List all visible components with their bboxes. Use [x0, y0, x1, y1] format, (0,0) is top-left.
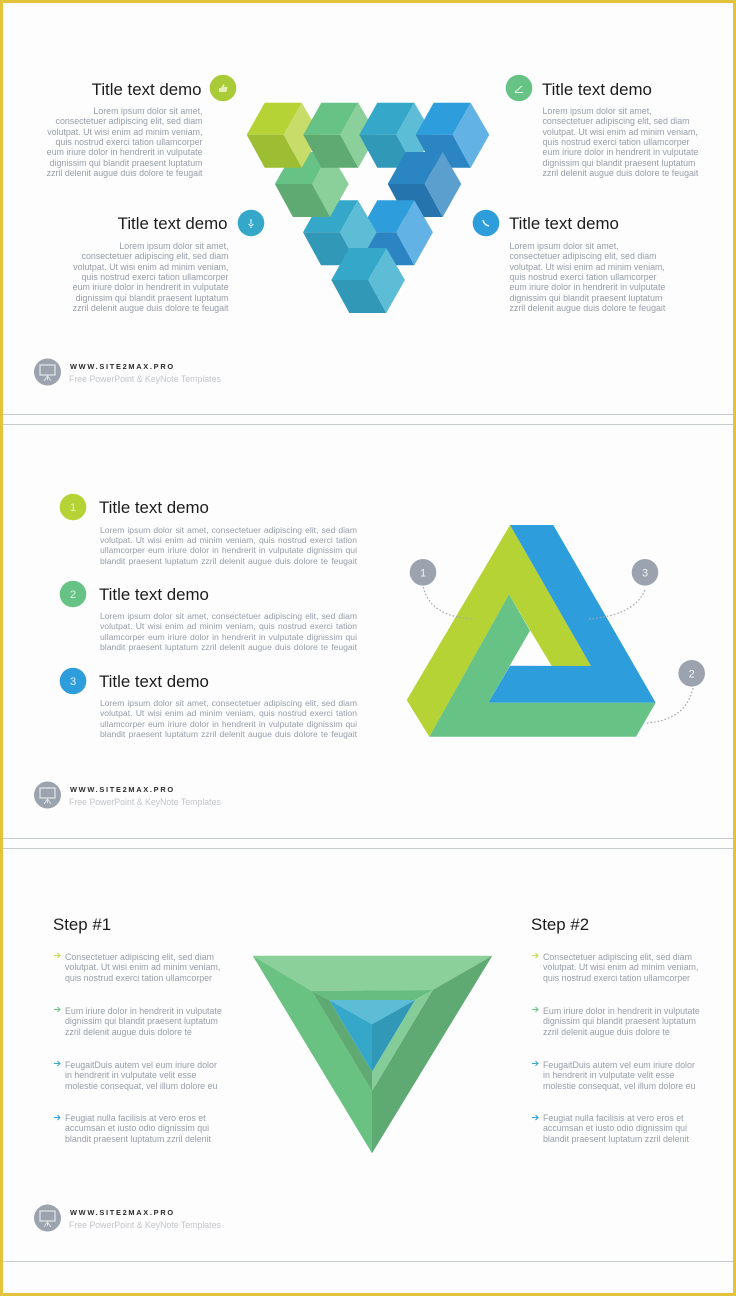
text: step 2 bullets — [543, 952, 700, 1144]
text: top right: Lorem ipsum dolor sit amet, — [542, 106, 652, 116]
text: top left: consectetuer adipiscing elit, sed diam — [56, 116, 202, 126]
text: mid right: dignissim qui blandit praesent luptatum — [510, 293, 662, 303]
text: mid right: Lorem ipsum dolor sit amet, — [510, 241, 619, 251]
text: step 1 bullets: volutpat. Ut wisi enim ad minim veniam, — [65, 962, 220, 972]
text: step 2 bullets: dignissim qui blandit praesent luptatum — [543, 1016, 696, 1026]
text: step 2 bullets: accumsan et iusto odio dignissim qui — [543, 1123, 687, 1133]
text: item 2: volutpat. Ut wisi enim ad minim veniam, quis nostrud exerci tation — [100, 621, 357, 631]
text: step 1 bullets: FeugaitDuis autem vel eum iriure dolor — [65, 1060, 217, 1070]
bullet arrows — [54, 953, 538, 1120]
text: top right: consectetuer adipiscing elit, sed diam — [542, 116, 689, 126]
text: mid right: quis nostrud exerci tation ullamcorper — [510, 272, 656, 282]
footer: slide 3 — [69, 1208, 221, 1230]
text: mid right: consectetuer adipiscing elit, sed diam — [510, 251, 656, 261]
text: item 1: Lorem ipsum dolor sit amet, consectetuer adipiscing elit, sed diam — [100, 524, 357, 534]
icon circles top — [210, 75, 532, 236]
text: step 2 bullets: volutpat. Ut wisi enim ad minim veniam, — [543, 962, 698, 972]
text: item 3 — [100, 698, 357, 739]
text: step 1 bullets: quis nostrud exerci tation ullamcorper — [65, 973, 212, 983]
text: top left: Lorem ipsum dolor sit amet, — [93, 106, 202, 116]
text: step 1 bullets: accumsan et iusto odio dignissim qui — [65, 1123, 209, 1133]
text: mid left: zzril delenit augue duis dolore te feugait — [73, 303, 228, 313]
text: item 3: volutpat. Ut wisi enim ad minim veniam, quis nostrud exerci tation — [100, 708, 357, 718]
callout circles — [410, 559, 705, 687]
heading: mid right: Title text demo — [509, 214, 619, 233]
cube triangle diagram — [247, 103, 489, 313]
text: step 1 bullets: in hendrerit in vulputate velit esse — [65, 1070, 196, 1080]
text: top left: dignissim qui blandit praesent luptatum — [50, 158, 202, 168]
text: top right: zzril delenit augue duis dolore te feugait — [542, 168, 698, 178]
footer: slide 2: WWW.SITE2MAX.PRO — [70, 785, 175, 794]
text: mid left: consectetuer adipiscing elit, sed diam — [82, 251, 228, 261]
footer icons — [34, 358, 61, 1232]
text: top left: quis nostrud exerci tation ullamcorper — [56, 137, 202, 147]
text: top right: eum iriure dolor in hendrerit in vulputate — [542, 147, 698, 157]
text: mid left — [73, 241, 228, 313]
text: item 2: blandit praesent luptatum zzril delenit augue duis dolore te feugait — [100, 642, 357, 652]
text: step 2 bullets: blandit praesent luptatum zzril delenit — [543, 1134, 689, 1144]
text: top right — [542, 106, 698, 178]
text: step 1 bullets: molestie consequat, vel illum dolore eu — [65, 1081, 217, 1091]
footer: slide 1: Free PowerPoint & KeyNote Templates — [69, 374, 221, 384]
footer: slide 1 — [69, 362, 221, 384]
text: item 1 — [100, 524, 357, 566]
number circles — [60, 494, 86, 694]
text: mid left: eum iriure dolor in hendrerit in vulputate — [73, 282, 228, 292]
text: item 1: blandit praesent luptatum zzril delenit augue duis dolore te feugait — [100, 556, 357, 566]
heading: top left: Title text demo — [92, 80, 202, 99]
number circles: 3 — [70, 676, 76, 688]
number circles: 2 — [70, 589, 76, 601]
text: mid left: Lorem ipsum dolor sit amet, — [119, 241, 228, 251]
heading: step 2: Step #2 — [531, 915, 589, 934]
number circles: 1 — [70, 502, 76, 514]
heading: item 2: Title text demo — [99, 585, 209, 604]
text: mid left: dignissim qui blandit praesent luptatum — [76, 293, 228, 303]
text: mid right: eum iriure dolor in hendrerit in vulputate — [510, 282, 665, 292]
footer: slide 2: Free PowerPoint & KeyNote Templates — [69, 796, 221, 806]
callout circles: 2 — [689, 668, 695, 680]
text: mid left: quis nostrud exerci tation ullamcorper — [82, 272, 228, 282]
text: top right: volutpat. Ut wisi enim ad minim veniam, — [542, 127, 698, 137]
text: step 2 bullets: zzril delenit augue duis dolore te — [543, 1027, 670, 1037]
callout circles: 3 — [642, 568, 648, 580]
heading: top right: Title text demo — [542, 80, 652, 99]
text: top left: volutpat. Ut wisi enim ad minim veniam, — [47, 127, 202, 137]
text: step 2 bullets: quis nostrud exerci tation ullamcorper — [543, 973, 690, 983]
text: mid left: volutpat. Ut wisi enim ad minim veniam, — [73, 262, 228, 272]
text: step 1 bullets — [65, 952, 222, 1144]
callout lines — [423, 587, 693, 723]
text: step 1 bullets: Feugiat nulla facilisis at vero eros et — [65, 1113, 206, 1123]
text: step 2 bullets: Eum iriure dolor in hendrerit in vulputate — [543, 1006, 700, 1016]
text: step 1 bullets: blandit praesent luptatum zzril delenit — [65, 1134, 211, 1144]
text: item 2: Lorem ipsum dolor sit amet, consectetuer adipiscing elit, sed diam — [100, 611, 357, 621]
text: item 3: ullamcorper eum iriure dolor in hendrerit in vulputate dignissim qui — [100, 719, 357, 729]
callout circles: 1 — [420, 568, 426, 580]
text: step 2 bullets: FeugaitDuis autem vel eum iriure dolor — [543, 1060, 695, 1070]
text: mid right: zzril delenit augue duis dolore te feugait — [510, 303, 665, 313]
text: step 1 bullets: Eum iriure dolor in hendrerit in vulputate — [65, 1006, 222, 1016]
text: item 1: ullamcorper eum iriure dolor in hendrerit in vulputate dignissim qui — [100, 545, 357, 555]
text: mid right: volutpat. Ut wisi enim ad minim veniam, — [510, 262, 665, 272]
text: top left: zzril delenit augue duis dolore te feugait — [47, 168, 202, 178]
text: item 2 — [100, 611, 357, 652]
nested pyramid diagram — [253, 956, 492, 1153]
footer: slide 3: WWW.SITE2MAX.PRO — [70, 1208, 175, 1217]
heading: item 3: Title text demo — [99, 672, 209, 691]
text: step 2 bullets: Feugiat nulla facilisis at vero eros et — [543, 1113, 684, 1123]
text: step 2 bullets: in hendrerit in vulputate velit esse — [543, 1070, 674, 1080]
heading: step 1: Step #1 — [53, 915, 111, 934]
footer: slide 1: WWW.SITE2MAX.PRO — [70, 362, 175, 371]
text: top left: eum iriure dolor in hendrerit in vulputate — [47, 147, 202, 157]
heading: item 1: Title text demo — [99, 498, 209, 517]
text: step 1 bullets: Consectetuer adipiscing elit, sed diam — [65, 952, 214, 962]
text: item 3: Lorem ipsum dolor sit amet, consectetuer adipiscing elit, sed diam — [100, 698, 357, 708]
text: top right: quis nostrud exerci tation ullamcorper — [542, 137, 689, 147]
text: item 3: blandit praesent luptatum zzril delenit augue duis dolore te feugait — [100, 729, 357, 739]
text: top left — [47, 106, 202, 178]
text: item 1: volutpat. Ut wisi enim ad minim veniam, quis nostrud exerci tation — [100, 535, 357, 545]
text: step 2 bullets: Consectetuer adipiscing elit, sed diam — [543, 952, 692, 962]
footer: slide 2 — [69, 785, 221, 807]
impossible triangle diagram — [407, 525, 656, 737]
heading: mid left: Title text demo — [118, 214, 228, 233]
text: mid right — [510, 241, 666, 313]
text: item 2: ullamcorper eum iriure dolor in hendrerit in vulputate dignissim qui — [100, 632, 357, 642]
text: step 1 bullets: dignissim qui blandit praesent luptatum — [65, 1016, 218, 1026]
text: step 1 bullets: zzril delenit augue duis dolore te — [65, 1027, 192, 1037]
text: step 2 bullets: molestie consequat, vel illum dolore eu — [543, 1081, 695, 1091]
text: top right: dignissim qui blandit praesent luptatum — [542, 158, 695, 168]
footer: slide 3: Free PowerPoint & KeyNote Templates — [69, 1220, 221, 1230]
